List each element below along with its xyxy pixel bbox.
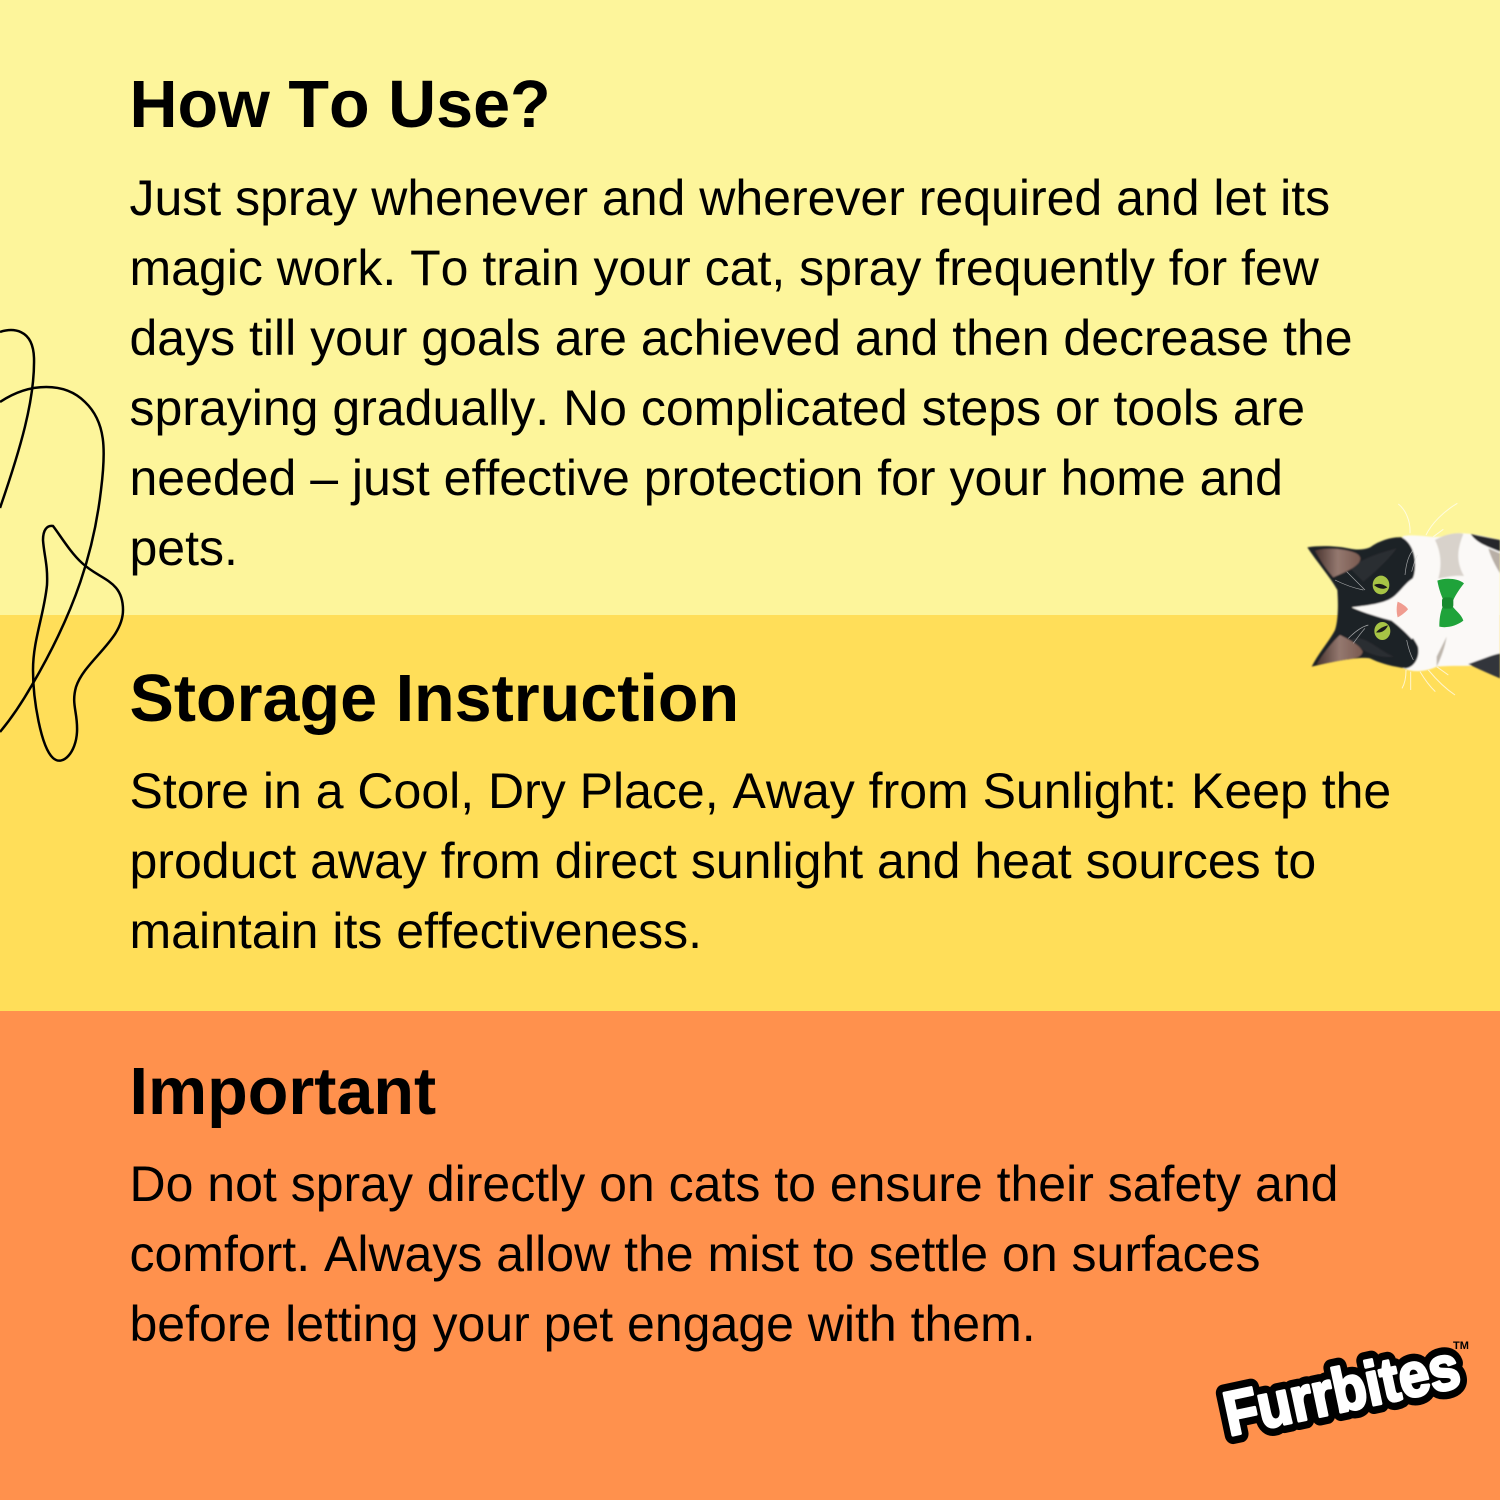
text block: how to use instructions: pets. (130, 520, 238, 576)
text block: storage instructions: product away from direct sunlight and heat sources to (130, 833, 1316, 889)
cat dark back patches (1471, 534, 1500, 552)
text block: important safety note: Do not spray directly on cats to ensure their safety and (130, 1156, 1338, 1212)
cat ear top (1315, 549, 1360, 577)
text block: important safety note: comfort. Always allow the mist to settle on surfaces (130, 1226, 1260, 1282)
cat white body (1380, 533, 1500, 671)
cat dark grey fur highlights (1350, 548, 1397, 582)
text block: how to use instructions: needed – just effective protection for your home and (130, 450, 1283, 506)
text block: how to use instructions: days till your goals are achieved and then decrease the (130, 310, 1352, 366)
text block: how to use instructions: magic work. To train your cat, spray frequently for few (130, 240, 1319, 296)
logo: Furrbites wordmark: Furrbites (1218, 1332, 1466, 1450)
cat eye bottom (1374, 622, 1390, 640)
cat black head (1307, 537, 1418, 668)
icon: tuxedo cat with green bow tie (1306, 503, 1500, 696)
text block: storage instructions: Store in a Cool, Dry Place, Away from Sunlight: Keep the (130, 763, 1391, 819)
cat white muzzle blaze (1352, 577, 1424, 639)
decorative squiggle line (0, 328, 124, 762)
text block: storage instructions (130, 763, 1391, 959)
cat grey shading (1435, 533, 1464, 579)
panel: how to use background (0, 0, 1500, 615)
cat ear bottom (1317, 635, 1363, 664)
heading: Important: Important (130, 1055, 436, 1129)
cat nose (1397, 602, 1408, 617)
cat eye top (1373, 576, 1389, 594)
heading: How To Use?: How To Use? (130, 68, 551, 142)
cat whiskers (1398, 503, 1457, 695)
text block: how to use instructions: spraying gradually. No complicated steps or tools are (130, 380, 1305, 436)
logo: Furrbites wordmark: Furrbites (1218, 1332, 1466, 1450)
text block: how to use instructions (130, 170, 1352, 576)
cat green bow tie (1437, 579, 1464, 627)
panel: important background (0, 1011, 1500, 1500)
cat whisker details (1335, 550, 1417, 660)
heading: Storage Instruction: Storage Instruction (130, 662, 739, 736)
text block: storage instructions: maintain its effectiveness. (130, 903, 702, 959)
logo trademark: TM (1453, 1340, 1469, 1352)
text block: how to use instructions: Just spray whenever and wherever required and let its (130, 170, 1330, 226)
panel: storage instruction background (0, 615, 1500, 1011)
text block: important safety note (130, 1156, 1338, 1352)
text block: important safety note: before letting your pet engage with them. (130, 1296, 1036, 1352)
